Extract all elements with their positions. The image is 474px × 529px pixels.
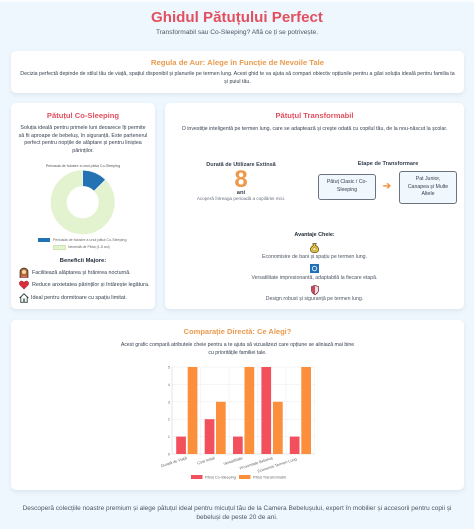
stage box: junior: Canapea și Multe [408,184,448,190]
title: Ghidul Pătuțului Perfect [151,9,323,26]
panel: golden rule [11,51,464,93]
golden rule text [20,71,455,85]
top strip [0,0,474,2]
icon: money bag [310,243,319,253]
co-sleeping description: părinților. [72,148,94,154]
stage box: classic [318,174,376,200]
benefit: bonding [19,280,149,290]
advantage text: versatility: Versatilitate impresionantă, adaptabilă la fiecare etapă. [251,275,378,281]
bar chart: Proximitate Bebeluș [239,455,273,471]
icon: mother [20,268,28,278]
comparison description: Acest grafic compară atributele cheie pentru a te ajuta să vizualizezi care opțiune se aliniază mai bine [121,342,354,348]
footer text: bebeluși de peste 20 de ani. [196,514,278,521]
bar chart: 2 [168,418,170,422]
benefit: feeding: Facilitează alăptarea și hrănirea nocturnă. [32,270,131,276]
comparison heading: Comparație Directă: Ce Alegi? [184,327,291,336]
bar chart: Pătuț Co-Sleeping [205,476,236,480]
stages heading: Etape de Transformare [358,161,418,167]
bar chart: Versatilitate [223,455,243,466]
golden rule text: Decizia perfectă depinde de stilul tău de viață, spațiul disponibil și planurile pe termen lung. Acest ghid te va ajuta să compari obiectiv opțiunile pentru a găsi soluția ideală pentru familia ta [20,71,455,77]
benefit: small space: Ideal pentru dormitoare cu spațiu limitat. [31,295,127,301]
bar chart: Durată de Viață [160,455,188,468]
donut legend: Necesită de Pătuț (1-8 ani) [68,245,110,249]
advantage text: savings: Economisire de bani și spațiu pe termen lung. [262,254,367,260]
comparison description [120,342,354,356]
stage box: junior [399,171,457,204]
icon: house [19,293,29,303]
co-sleeping heading: Pătuțul Co-Sleeping [47,111,119,120]
bar chart: 4 [168,383,170,387]
golden rule text: și puiul tău. [224,79,251,85]
stat: duration [196,162,285,201]
donut chart title: Perioada de folosire a unui pătuț Co-Sleeping [46,164,120,168]
co-sleeping description: să fii aproape de bebeluș, în siguranță. Este partenerul [19,132,147,138]
subtitle: Transformabil sau Co-Sleeping? Află ce ți se potrivește. [156,29,318,36]
stage box: junior: Altele [422,191,434,197]
footer text: Descoperă colecțiile noastre premium și alege pătuțul ideal pentru micuțul tău de la Camera Bebelușului, expert în mobilier și accesorii pentru copii și [23,505,451,512]
bar chart: Economie Termen Lung [257,456,297,474]
benefit: bonding: Reduce anxietatea părinților și întărește legătura. [32,282,149,288]
bar chart: 5 [168,366,170,370]
stat unit: ani [237,190,245,196]
bar chart: Cost Inițial [196,455,215,466]
transformable description: O investiție inteligentă pe termen lung, care se adaptează și crește odată cu copilul tău, de la nou-născut la școlar. [182,126,447,132]
bar chart: Pătuț Transformabil [253,476,286,480]
benefits heading: Beneficii Majore: [60,258,106,264]
arrow: ➔ [383,181,391,192]
benefit: feeding [20,268,131,278]
transformable heading: Pătuțul Transformabil [275,111,354,120]
stage box: classic: Sleeping [337,187,357,193]
icon: shield [311,285,319,295]
benefit: small space [19,293,127,303]
bar chart: 3 [168,400,170,404]
key advantages [251,232,378,302]
stat heading: Durată de Utilizare Extinsă [206,162,276,168]
bar chart: 0 [168,452,170,456]
co-sleeping description: Soluția ideală pentru primele luni deoarece îți permite [20,125,146,131]
bar chart: 1 [168,435,170,439]
stage box: junior: Pat Junior, [416,176,440,182]
panel: comparison [11,320,464,490]
advantage text: safety: Design robust și siguranță pe termen lung. [266,296,363,302]
stage box: classic: Pătuț Clasic / Co- [327,179,367,185]
co-sleeping description: perfect pentru nopțile de alăptare și pentru liniștea [24,140,142,146]
donut legend: Perioada de folosire a unui pătuț Co-Sleeping [53,238,126,242]
icon: heart [19,280,29,290]
golden rule heading: Regula de Aur: Alege în Funcție de Nevoile Tale [151,58,324,67]
transformation stages [318,161,457,204]
donut legend [38,238,126,250]
panel: transformable [165,103,464,309]
co-sleeping description [18,125,147,154]
comparison description: cu prioritățile familiei tale. [208,350,267,356]
stat number: 8 [234,166,248,193]
footer text [23,505,451,521]
stat note: Acoperă întreaga perioadă a copilăriei mici. [197,196,285,201]
panel: co-sleeping [11,103,155,309]
advantages heading: Avantaje Cheie: [294,232,335,238]
icon: cycle [310,264,319,273]
